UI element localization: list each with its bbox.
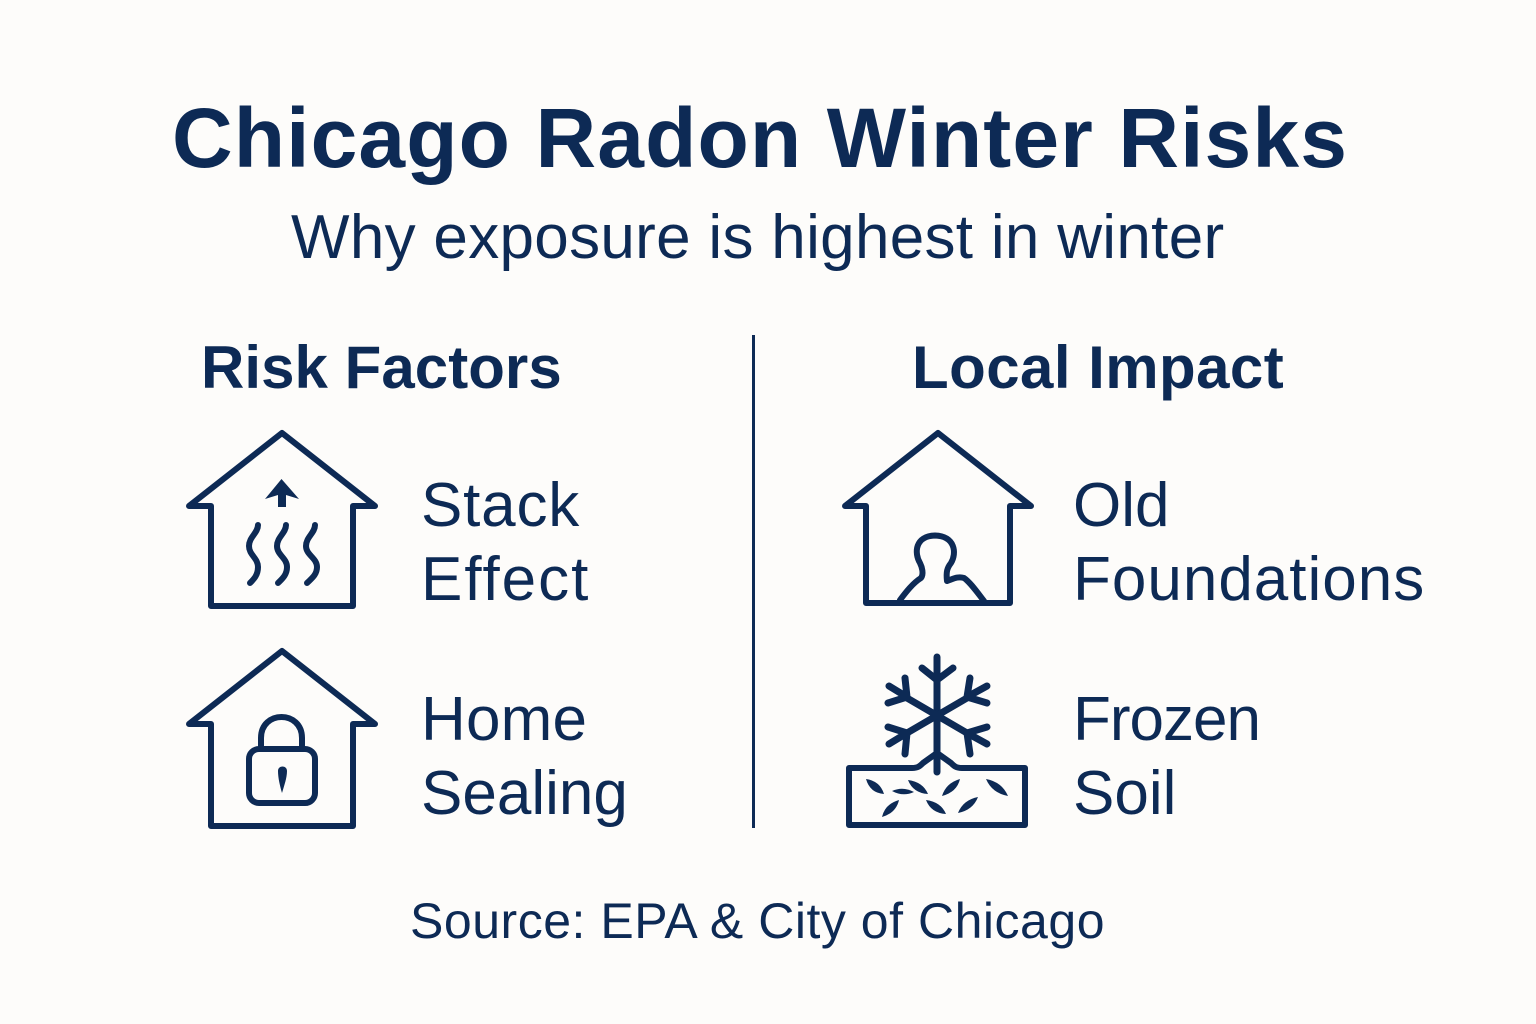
heading: risk factors: Risk Factors xyxy=(201,334,562,401)
text: frozen soil xyxy=(1073,685,1260,828)
text: home sealing: Sealing xyxy=(421,759,628,828)
text: old foundations: Old xyxy=(1073,471,1169,540)
text: stack effect: Stack xyxy=(421,471,580,540)
subtitle: Why exposure is highest in winter xyxy=(291,203,1224,272)
text: stack effect: Effect xyxy=(421,545,590,614)
text: stack effect xyxy=(421,471,590,614)
text: frozen soil: Soil xyxy=(1073,759,1176,828)
text: home sealing xyxy=(421,685,628,828)
source note: Source: EPA & City of Chicago xyxy=(410,893,1105,949)
title: Chicago Radon Winter Risks xyxy=(172,91,1348,185)
text: old foundations: Foundations xyxy=(1073,545,1425,614)
heading: local impact: Local Impact xyxy=(912,334,1284,401)
text: frozen soil: Frozen xyxy=(1073,685,1260,754)
text: old foundations xyxy=(1073,471,1425,614)
center divider xyxy=(752,335,755,828)
text: home sealing: Home xyxy=(421,685,587,754)
